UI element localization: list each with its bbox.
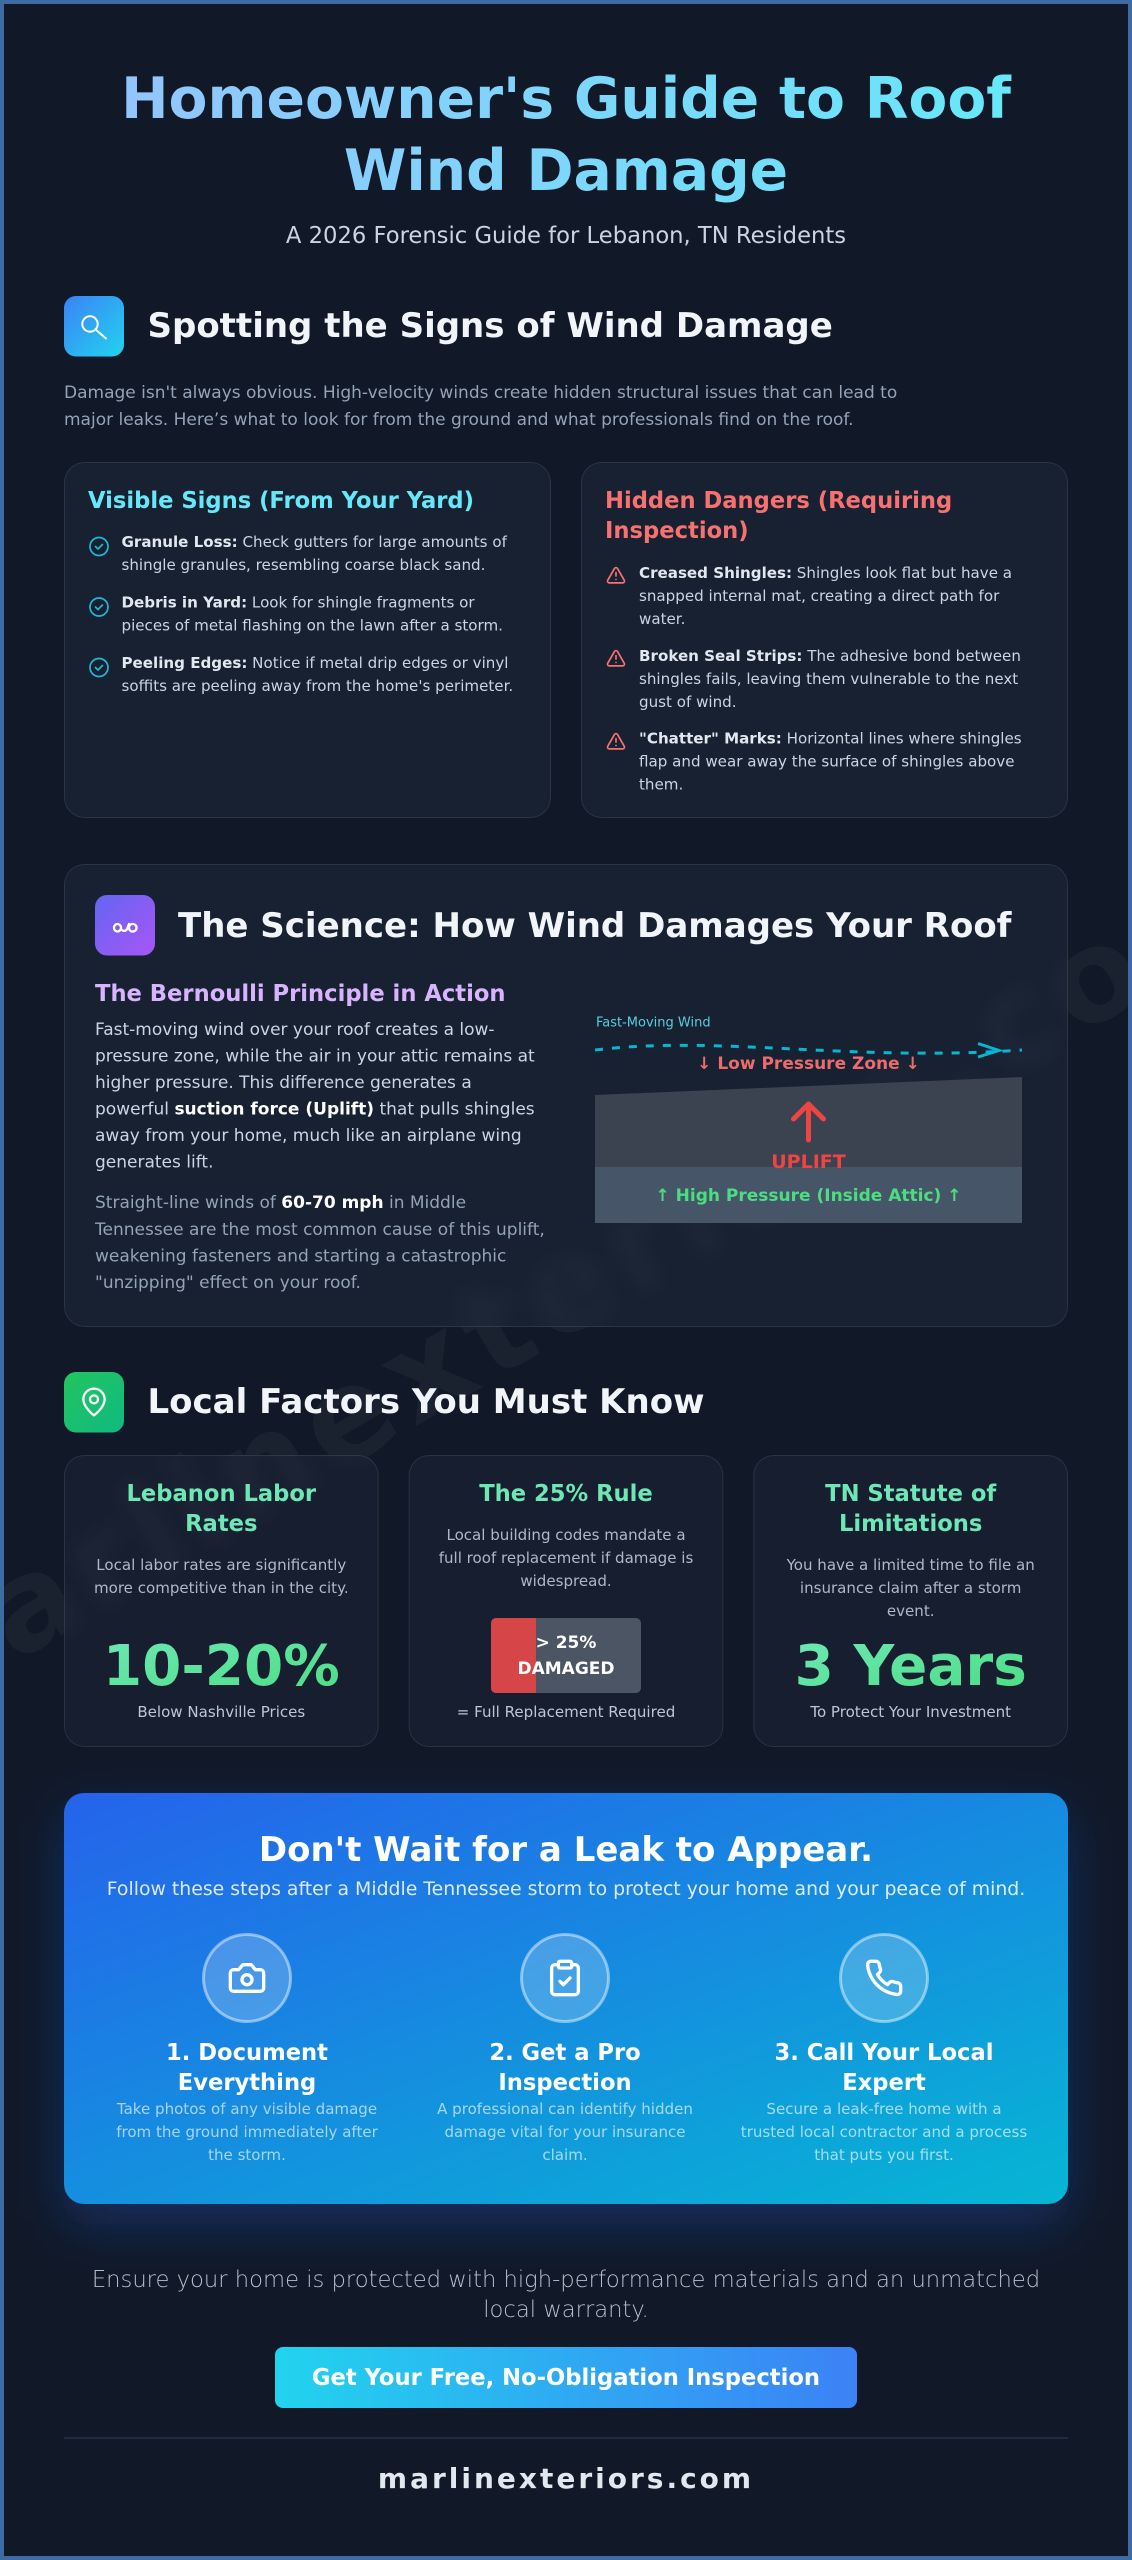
text block: wind speeds: 60-70 mph in Middle <box>281 1193 466 1213</box>
icon: phone <box>840 1934 928 2022</box>
step 2: A professional can identify hidden <box>437 2100 693 2118</box>
title: Homeowner's Guide to Roof <box>121 66 1012 132</box>
list item: creased shingles: snapped internal mat, creating a direct path for <box>639 587 1000 605</box>
heading: TN Statute of <box>825 1481 997 1507</box>
list item: debris: Look for shingle fragments or <box>252 594 475 612</box>
subheading: bernoulli: The Bernoulli Principle in Action <box>95 981 506 1007</box>
list item: debris: pieces of metal flashing on the lawn after a storm. <box>122 616 503 634</box>
list item: creased shingles: water. <box>639 610 685 628</box>
panel: visible signs <box>64 462 550 818</box>
diagram: roof uplift: ↑ High Pressure (Inside Attic) ↑ <box>656 1186 961 1206</box>
list item: granule loss: Granule Loss: <box>122 533 238 551</box>
panel: statute of limitations <box>754 1456 1068 1746</box>
text block: explanation: generates lift. <box>95 1152 213 1172</box>
diagram: roof uplift: Fast-Moving Wind <box>596 1016 711 1030</box>
heading: hidden dangers: Inspection) <box>605 518 749 544</box>
title <box>121 66 1012 204</box>
caption: Below Nashville Prices <box>137 1703 305 1721</box>
heading: visible signs: Visible Signs (From Your Yard) <box>88 488 474 514</box>
intro text: major leaks. Here’s what to look for from the ground and what professionals find on the roof. <box>64 410 854 430</box>
step 3: trusted local contractor and a process <box>741 2123 1027 2141</box>
caption: To Protect Your Investment <box>809 1703 1011 1721</box>
website: marlinexteriors.com <box>378 2462 754 2495</box>
section heading: local factors: Local Factors You Must Know <box>148 1382 704 1422</box>
list item: broken seal strips: The adhesive bond between <box>807 647 1021 665</box>
text block: wind speeds: "unzipping" effect on your roof. <box>95 1273 361 1293</box>
step 3: Secure a leak-free home with a <box>766 2100 1002 2118</box>
list item: peeling edges: soffits are peeling away from the home's perimeter. <box>122 677 513 695</box>
step 3 <box>741 1934 1027 2164</box>
step 2 <box>437 1934 693 2164</box>
diagram: roof uplift <box>595 1016 1022 1223</box>
text block: explanation: suction force (Uplift) that pulls shingles <box>174 1100 535 1120</box>
text block: explanation: away from your home, much like an airplane wing <box>95 1126 522 1146</box>
step 1: from the ground immediately after <box>116 2123 379 2141</box>
subheading: Follow these steps after a Middle Tennessee storm to protect your home and your peace of mind. <box>107 1878 1025 1900</box>
panel: lebanon labor rates <box>64 1456 378 1746</box>
heading: hidden dangers: Hidden Dangers (Requiring <box>605 488 952 514</box>
description: insurance claim after a storm <box>800 1579 1021 1597</box>
button: free inspection: Get Your Free, No-Obligation Inspection <box>312 2365 820 2391</box>
list item: broken seal strips: shingles fails, leaving them vulnerable to the next <box>639 670 1018 688</box>
panel: hidden dangers <box>582 462 1068 818</box>
step 2: Inspection <box>498 2070 632 2096</box>
step 1: the storm. <box>208 2146 286 2164</box>
section heading: spotting signs <box>64 296 833 356</box>
description: full roof replacement if damage is <box>439 1549 693 1567</box>
step 3: 3. Call Your Local <box>774 2040 994 2066</box>
diagram: roof uplift: UPLIFT <box>771 1151 846 1173</box>
section heading: local factors <box>64 1372 704 1432</box>
panel: the science <box>64 864 1068 1326</box>
list item: debris <box>90 594 503 634</box>
list item: chatter marks: them. <box>639 776 683 794</box>
list item: broken seal strips <box>607 647 1021 711</box>
description: You have a limited time to file an <box>786 1556 1035 1574</box>
list item: granule loss <box>90 533 508 574</box>
icon: camera <box>204 1934 290 2022</box>
heading: science: The Science: How Wind Damages Your Roof <box>178 906 1013 946</box>
list item: chatter marks: "Chatter" Marks: <box>639 730 782 748</box>
text block: explanation: Fast-moving wind over your roof creates a low- <box>95 1020 495 1040</box>
step 3: Expert <box>842 2070 926 2096</box>
icon: wind loops <box>95 895 155 956</box>
closing statement: Ensure your home is protected with high-performance materials and an unmatched <box>92 2267 1040 2293</box>
panel: call to action steps <box>64 1793 1068 2224</box>
step 1: 1. Document <box>166 2040 328 2066</box>
text block: explanation: pressure zone, while the air in your attic remains at <box>95 1046 535 1066</box>
list item: peeling edges: Peeling Edges: <box>122 654 247 672</box>
description: more competitive than in the city. <box>94 1579 349 1597</box>
text block: wind speeds: Straight-line winds of <box>95 1193 281 1213</box>
list item: creased shingles: Shingles look flat but have a <box>797 564 1012 582</box>
icon: search <box>64 296 124 356</box>
damage bar: > 25% <box>536 1633 596 1653</box>
list item: granule loss: shingle granules, resembling coarse black sand. <box>122 556 485 574</box>
list item: broken seal strips: Broken Seal Strips: <box>639 647 802 665</box>
list item: chatter marks: Horizontal lines where shingles <box>787 730 1022 748</box>
closing statement: local warranty. <box>483 2297 649 2323</box>
heading: The 25% Rule <box>479 1481 653 1507</box>
subtitle: A 2026 Forensic Guide for Lebanon, TN Residents <box>286 223 846 249</box>
stat: 3 Years <box>795 1634 1027 1699</box>
text block: explanation: higher pressure. This difference generates a <box>95 1073 472 1093</box>
diagram: roof uplift: ↓ Low Pressure Zone ↓ <box>697 1054 920 1074</box>
panel: 25% rule <box>409 1456 723 1746</box>
list item: broken seal strips: gust of wind. <box>639 693 737 711</box>
section heading: spotting signs: Spotting the Signs of Wind Damage <box>148 306 833 346</box>
step 1 <box>116 1934 379 2164</box>
step 2: 2. Get a Pro <box>489 2040 641 2066</box>
step 3: that puts you first. <box>814 2146 954 2164</box>
text block: wind speeds: Tennessee are the most common cause of this uplift, <box>94 1220 545 1240</box>
step 1: Everything <box>178 2070 316 2096</box>
button: free inspection <box>275 2347 857 2408</box>
stat: 10-20% <box>103 1634 340 1699</box>
damage bar: DAMAGED <box>517 1659 615 1679</box>
list item: peeling edges: Notice if metal drip edges or vinyl <box>252 654 508 672</box>
list item: granule loss: Check gutters for large amounts of <box>242 533 507 551</box>
list item: chatter marks <box>607 730 1022 794</box>
list item: creased shingles <box>607 564 1012 628</box>
description: Local building codes mandate a <box>446 1526 686 1544</box>
list item: peeling edges <box>90 654 513 695</box>
heading: Lebanon Labor <box>127 1481 317 1507</box>
step 2: damage vital for your insurance <box>444 2123 686 2141</box>
list item: chatter marks: flap and wear away the surface of shingles above <box>639 752 1014 770</box>
list item: creased shingles: Creased Shingles: <box>639 564 792 582</box>
text block: wind speeds: weakening fasteners and starting a catastrophic <box>95 1246 506 1266</box>
description: widespread. <box>520 1572 612 1590</box>
description: Local labor rates are significantly <box>96 1556 346 1574</box>
caption: = Full Replacement Required <box>457 1703 675 1721</box>
icon: clipboard check <box>522 1934 608 2022</box>
heading: Don't Wait for a Leak to Appear. <box>259 1830 873 1870</box>
list item: debris: Debris in Yard: <box>122 594 247 612</box>
heading: Limitations <box>839 1511 982 1537</box>
title: Wind Damage <box>344 138 788 204</box>
step 2: claim. <box>542 2146 588 2164</box>
heading: Rates <box>185 1511 257 1537</box>
damage bar <box>491 1618 641 1693</box>
text block: explanation: powerful <box>95 1100 174 1120</box>
step 1: Take photos of any visible damage <box>116 2100 377 2118</box>
description: event. <box>887 1602 935 1620</box>
icon: map pin <box>64 1372 124 1432</box>
intro text: Damage isn't always obvious. High-velocity winds create hidden structural issues that can lead to <box>64 383 897 403</box>
